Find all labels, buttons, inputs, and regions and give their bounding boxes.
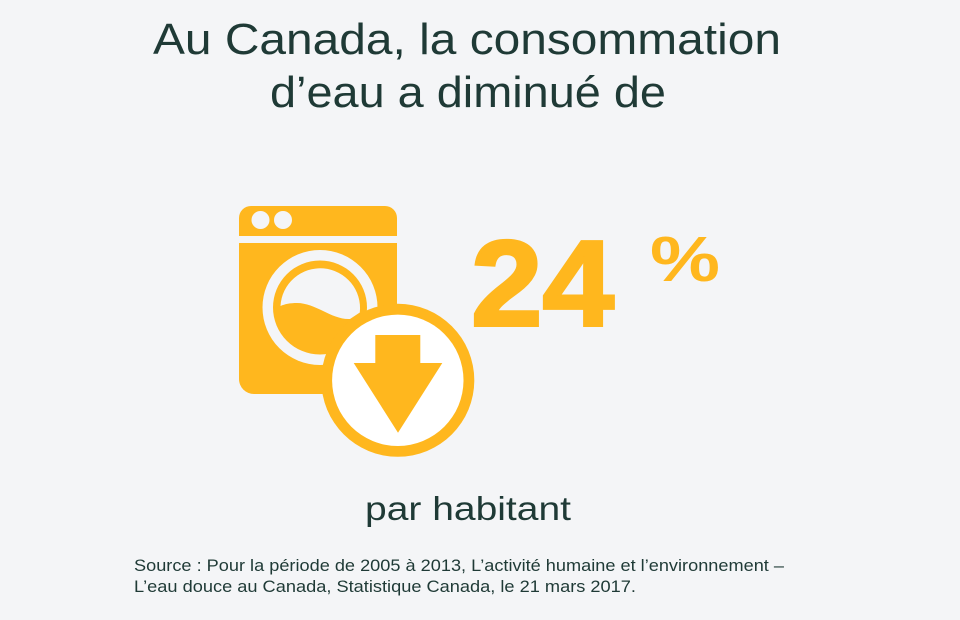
source note: Source : Pour la période de 2005 à 2013, L’activité humaine et l’environnement – xyxy=(134,557,785,575)
icon: washing machine with down arrow xyxy=(239,206,474,457)
source note: L’eau douce au Canada, Statistique Canada, le 21 mars 2017. xyxy=(134,578,636,596)
icon: down arrow badge xyxy=(321,304,474,457)
statistic: 24 % xyxy=(471,216,720,352)
title xyxy=(153,15,781,117)
statistic: 24 %: % xyxy=(650,223,720,295)
source note xyxy=(134,557,785,596)
subtitle: par habitant: par habitant xyxy=(365,490,571,527)
title: Au Canada, la consommation xyxy=(153,15,781,64)
icon: washing machine xyxy=(239,206,397,394)
statistic: 24 %: 24 xyxy=(471,216,614,352)
title: d’eau a diminué de xyxy=(270,68,666,117)
